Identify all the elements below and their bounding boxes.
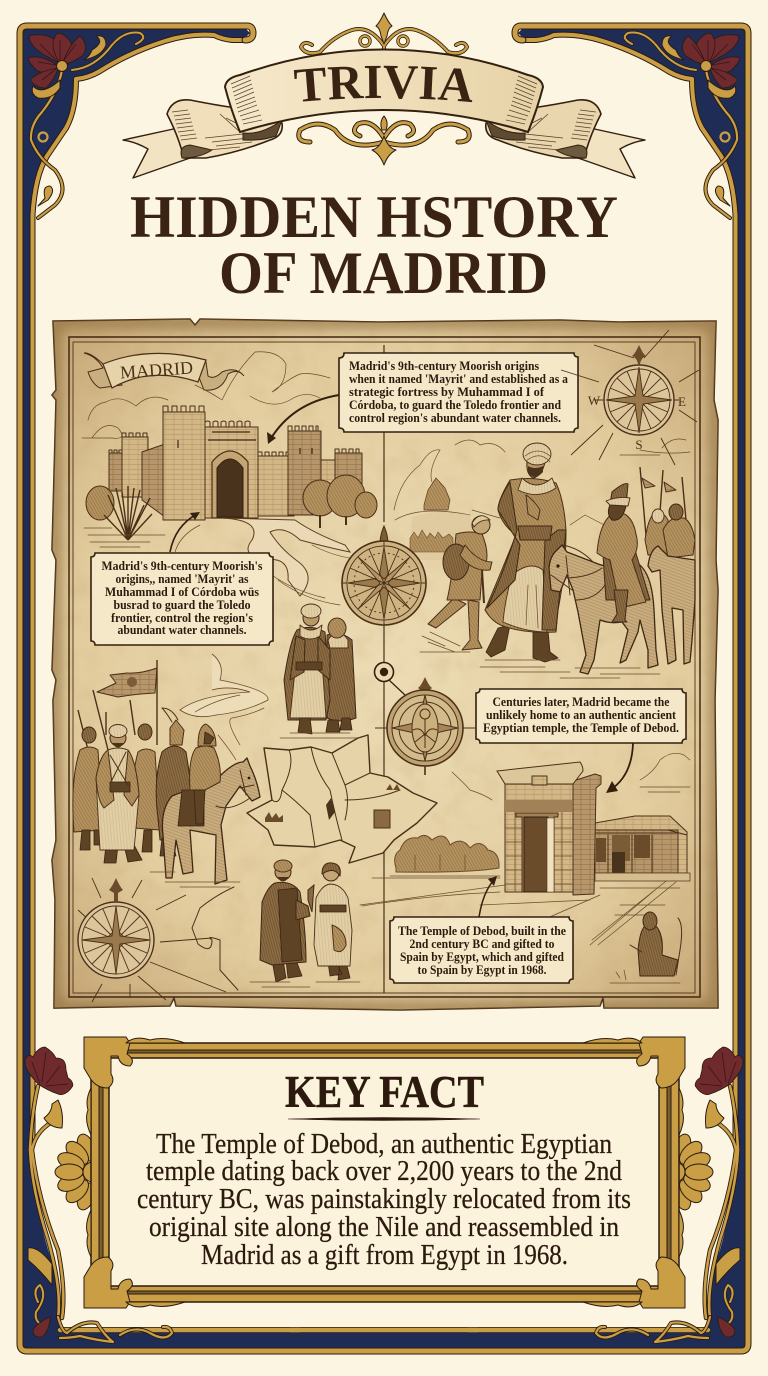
illustration: bushes and shrub [84,475,377,547]
compass rose: top right: E [678,394,686,409]
callout: temple built: Spain by Egypt, which and gifted [400,949,565,964]
callout: moorish origins top [339,353,578,432]
illustration: robed moorish man [480,443,570,672]
callout: moorish origins lower: Madrid's 9th-century Moorish's [102,558,262,573]
banner: trivia ribbon [122,48,646,179]
panel: parchment map [52,319,718,1010]
frame corner: bottom-left [84,1257,132,1308]
key fact body text: temple dating back over 2,200 years to the 2nd [146,1156,622,1187]
illustration: couple at centre [280,604,360,738]
ribbon tail: left [123,100,282,178]
heading rule [288,1118,480,1120]
callout: moorish origins lower: abundant water channels. [118,622,246,637]
key fact gold frame [84,1037,685,1308]
panel: key fact [25,1037,743,1342]
arrow: lower callout to temple [479,876,497,917]
illustration: left river [180,654,268,760]
callout: temple built [390,917,573,983]
arrow: callout to castle [267,395,339,444]
arrow: callout to temple [606,743,633,793]
key fact body text: Madrid as a gift from Egypt in 1968. [201,1240,568,1271]
callout: moorish origins lower: origins,, named 'Mayrit' as [116,571,248,586]
arrow: lower callout to castle [170,512,200,552]
title: OF MADRID [219,240,548,306]
illustration: rider on horse left [150,724,260,887]
callout: centuries later: unlikely home to an authentic ancient [486,707,677,722]
illustration: clouds left [82,352,330,438]
compass rose: top right [561,330,699,465]
callout: moorish origins lower: frontier, control the region's [111,610,253,625]
ribbon tail: right [486,100,645,178]
flower: top-right [682,33,740,88]
callout: moorish origins top: control region's abundant water channels. [349,410,561,425]
callout: moorish origins lower: Muhammad I of Córdoba wüs [105,584,259,599]
callout: temple built: The Temple of Debod, built in the [398,923,566,938]
compass rose: centre [342,526,426,625]
illustration: clouds near temple [452,753,690,800]
illustration: boy with sack [420,516,492,652]
title [130,184,618,306]
stems and leaves: left [25,1047,172,1342]
compass rose: egyptian medallion [375,677,475,775]
illustration: temple grounds and trees [360,835,680,945]
ornament: flourish above banner [301,13,467,53]
connector: target dot and line [374,662,405,695]
key fact body text [137,1129,631,1271]
frame: left half [20,26,386,1351]
callout: temple built: 2nd century BC and gifted to [410,936,554,951]
illustration: regional map [247,735,437,863]
banner title: TRIVIA [294,66,472,102]
title: HIDDEN HSTORY [130,184,618,250]
frame edge waves [87,1038,683,1307]
callout: moorish origins lower: busrad to guard the Toledo [114,597,250,612]
illustration: moorish castle [109,406,362,520]
illustration: coastline [192,887,238,990]
frame: right half [382,26,748,1351]
callout: moorish origins top: when it named 'Mayrit' and established as a [349,371,568,386]
frame corner: top-right [637,1037,685,1088]
illustration: rider on horse [549,484,660,678]
map label: madrid ribbon [84,353,244,390]
illustration: hills and distant fortress right [394,439,690,560]
ornament: flourish below banner [299,116,469,165]
frame: bottom rails [290,1330,478,1351]
callout: centuries later [476,689,686,743]
key fact heading: KEY FACT [285,1067,484,1117]
illustration: seated figure [610,912,682,983]
frame corner: top-left [84,1037,132,1088]
callout: moorish origins top: strategic fortress by Muhammad I of [349,384,545,399]
frame corner: bottom-right [637,1257,685,1308]
fan ornament: right [665,1132,713,1212]
compass rose: top right: W [588,393,601,408]
callout: centuries later: Centuries later, Madrid became the [492,694,670,709]
illustration: rear riders [640,467,695,664]
illustration: couple exchanging gift [250,860,360,987]
key fact body text: original site along the Nile and reassembled in [149,1212,619,1243]
flower: lower left [25,1047,73,1095]
key fact body text: The Temple of Debod, an authentic Egyptian [156,1129,612,1160]
illustration: moorish soldiers [73,660,192,863]
compass rose: top right: S [635,437,643,452]
key fact body text: century BC, was painstakingly relocated from its [137,1184,631,1215]
illustration: temple of debod [497,762,690,895]
callout: moorish origins lower [91,553,273,645]
ribbon centre [225,50,543,132]
callout: moorish origins top: Madrid's 9th-century Moorish origins [349,358,539,373]
stems and leaves: right [596,1047,743,1342]
callout: centuries later: Egyptian temple, the Temple of Debod. [483,720,679,735]
callout: temple built: to Spain by Egypt in 1968. [418,962,546,977]
map label: madrid ribbon: MADRID [119,357,194,382]
ribbon fold shadows [243,120,525,140]
fan ornament: left [55,1132,103,1212]
compass rose: lower left [78,878,226,1002]
flower: top-left [28,33,86,88]
flower: lower right [695,1047,743,1095]
callout: moorish origins top: Córdoba, to guard the Toledo frontier and [349,397,562,412]
illustration: river [175,518,372,605]
